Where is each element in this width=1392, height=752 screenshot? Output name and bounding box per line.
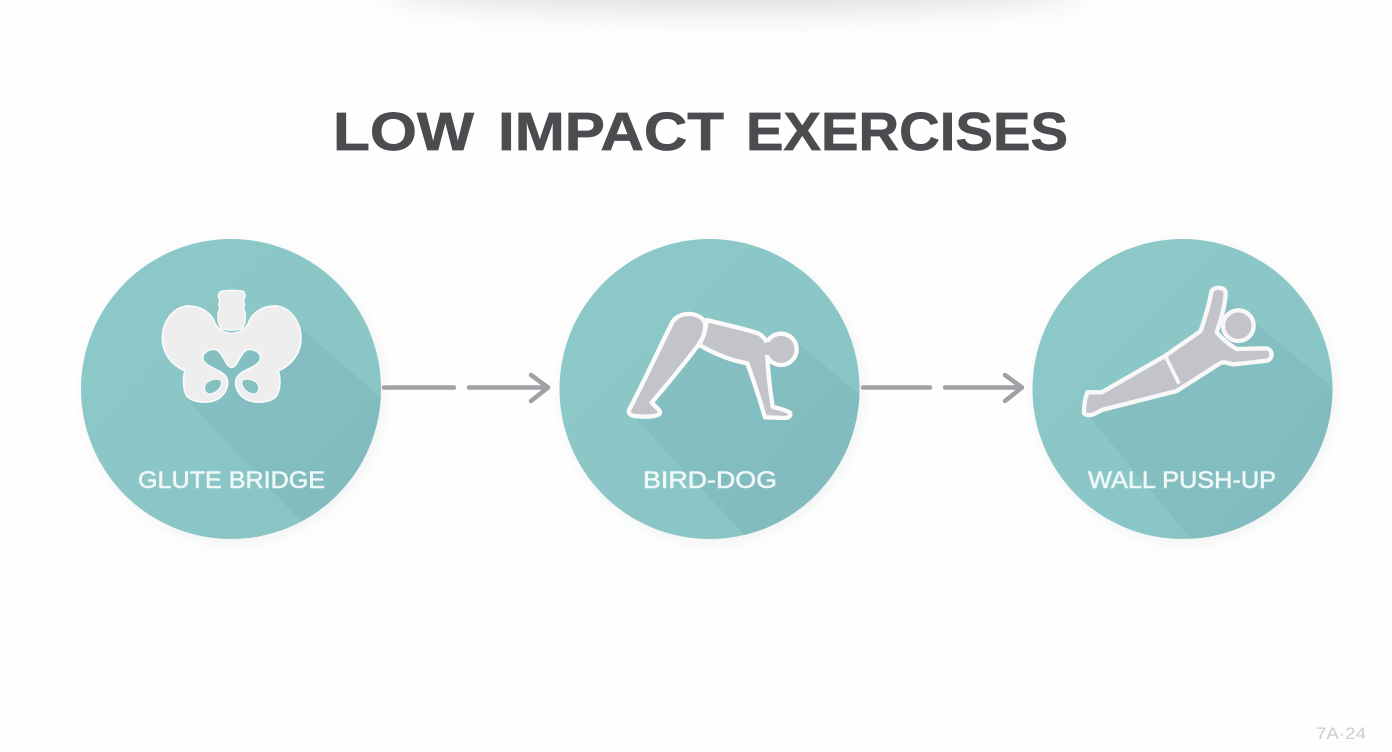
icon: pelvis xyxy=(162,290,301,402)
label: bird-dog: BIRD-DOG xyxy=(643,467,777,494)
label: glute bridge: GLUTE BRIDGE xyxy=(138,467,325,494)
teal circle: bird-dog xyxy=(560,239,860,539)
teal circle: glute bridge xyxy=(81,239,381,539)
title: LOW xyxy=(333,102,474,162)
arrow: bird-dog to wall push-up xyxy=(863,375,1022,401)
arrow: glute bridge to bird-dog xyxy=(384,375,548,401)
teal circle: wall push-up xyxy=(1032,239,1332,539)
panel: bird-dog xyxy=(560,239,860,541)
panel: wall push-up xyxy=(1032,239,1333,541)
icon: bird-dog figure xyxy=(629,314,797,418)
icon: wall push-up figure xyxy=(1084,288,1272,415)
footer code: 7A·24 xyxy=(1316,724,1366,743)
label: wall push-up: WALL PUSH-UP xyxy=(1088,467,1276,494)
panel: glute bridge xyxy=(81,239,382,541)
title xyxy=(333,102,1068,162)
title: IMPACT xyxy=(498,102,724,162)
title: EXERCISES xyxy=(746,102,1068,162)
